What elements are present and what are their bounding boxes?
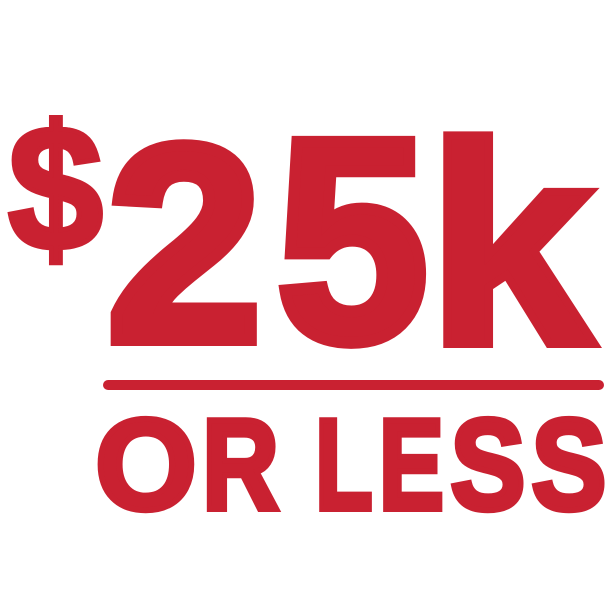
- label: or less: R: [202, 393, 279, 537]
- amount: 25: 2: [107, 88, 262, 400]
- amount: 25: 5: [277, 80, 428, 402]
- label: or less: O: [95, 393, 197, 537]
- label: or less: E: [379, 393, 444, 537]
- amount: 25: [107, 80, 428, 402]
- label: or less: [95, 393, 606, 537]
- dollar sign: $: [8, 89, 103, 288]
- divider line: [103, 380, 604, 390]
- label: or less: S: [450, 393, 525, 537]
- letter k: k: [426, 84, 596, 406]
- label: or less: L: [315, 393, 373, 537]
